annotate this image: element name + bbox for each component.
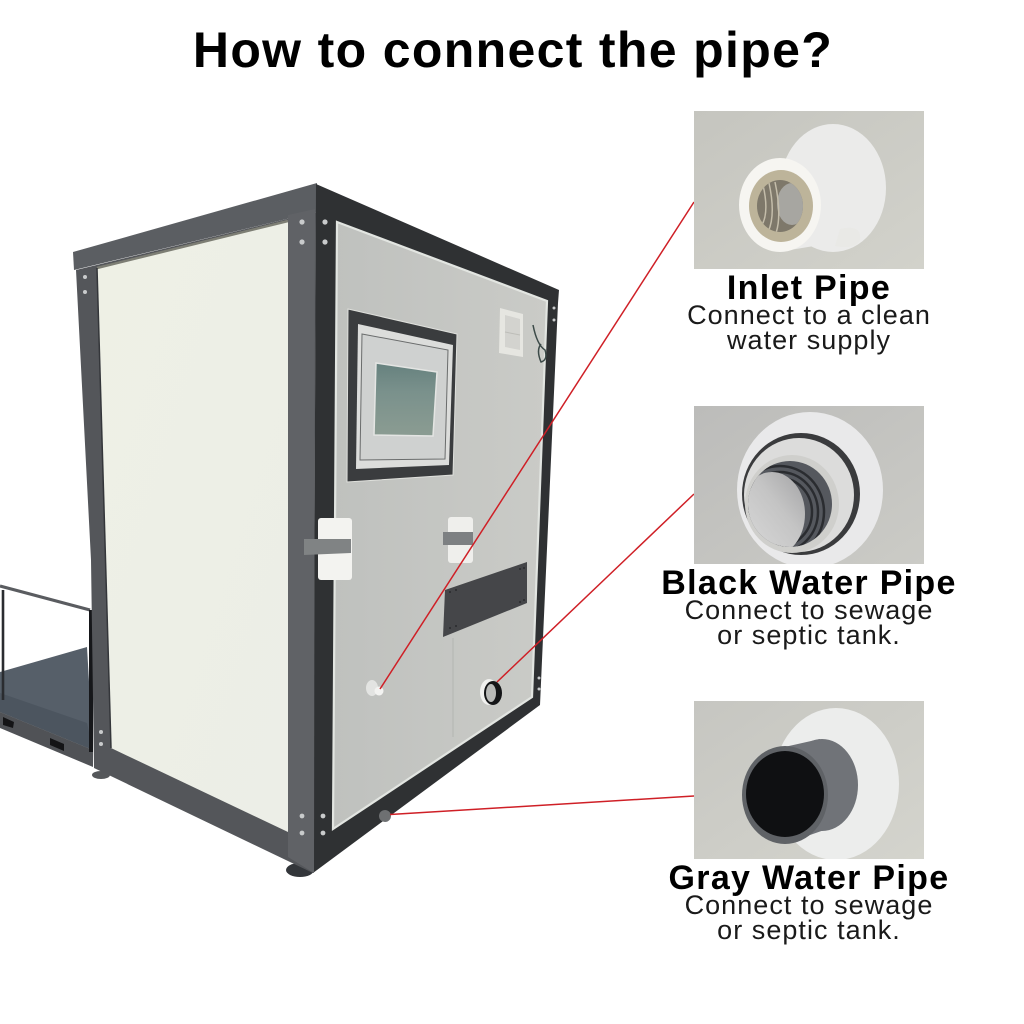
left hinge xyxy=(304,518,352,580)
right cabin wall frame xyxy=(313,184,559,873)
label: black water pipe xyxy=(661,564,957,650)
heading: black water pipe: Black Water Pipe xyxy=(661,564,957,602)
text: gray water pipe description xyxy=(685,890,933,945)
window sash xyxy=(356,324,453,469)
connector line: inlet xyxy=(380,202,694,689)
left cabin wall frame xyxy=(76,212,316,873)
vent plate xyxy=(443,562,527,637)
label: gray water pipe xyxy=(669,859,949,945)
right hinge xyxy=(443,517,473,563)
heading: inlet pipe: Inlet Pipe xyxy=(727,269,891,307)
wall switch box xyxy=(499,308,523,357)
platform and railing xyxy=(0,586,93,767)
cabin feet xyxy=(92,771,314,877)
photo: inlet pipe xyxy=(694,111,924,269)
corner post xyxy=(288,209,315,873)
window glass xyxy=(374,363,437,436)
connector line: gray water xyxy=(390,796,694,814)
text: black water pipe description: Connect to sewage xyxy=(685,595,933,625)
text: gray water pipe description: Connect to sewage xyxy=(685,890,933,920)
text: inlet pipe description: Connect to a clean xyxy=(687,300,931,330)
text: gray water pipe description: or septic tank. xyxy=(717,915,901,945)
illustration: portable toilet cabin and connector lines xyxy=(0,111,924,877)
top left beam xyxy=(73,183,317,270)
title: How to connect the pipe? xyxy=(193,22,833,78)
heading: gray water pipe: Gray Water Pipe xyxy=(669,859,949,897)
inlet fitting xyxy=(366,680,384,696)
door seam xyxy=(452,638,454,737)
window frame xyxy=(347,309,457,482)
rivets xyxy=(83,219,556,835)
text: black water pipe description: or septic tank. xyxy=(717,620,901,650)
right gray door panel xyxy=(333,222,547,829)
gray water fitting xyxy=(379,810,391,822)
connector line: black water xyxy=(497,494,694,682)
label: inlet pipe xyxy=(687,269,931,355)
wire xyxy=(533,325,546,362)
left white panel xyxy=(97,221,288,832)
photo: gray water pipe xyxy=(694,701,924,860)
text: black water pipe description xyxy=(685,595,933,650)
text: inlet pipe description: water supply xyxy=(727,325,891,355)
cabin xyxy=(0,183,559,877)
black water fitting xyxy=(480,679,502,705)
photo: black water pipe xyxy=(694,406,924,568)
text: inlet pipe description xyxy=(687,300,931,355)
